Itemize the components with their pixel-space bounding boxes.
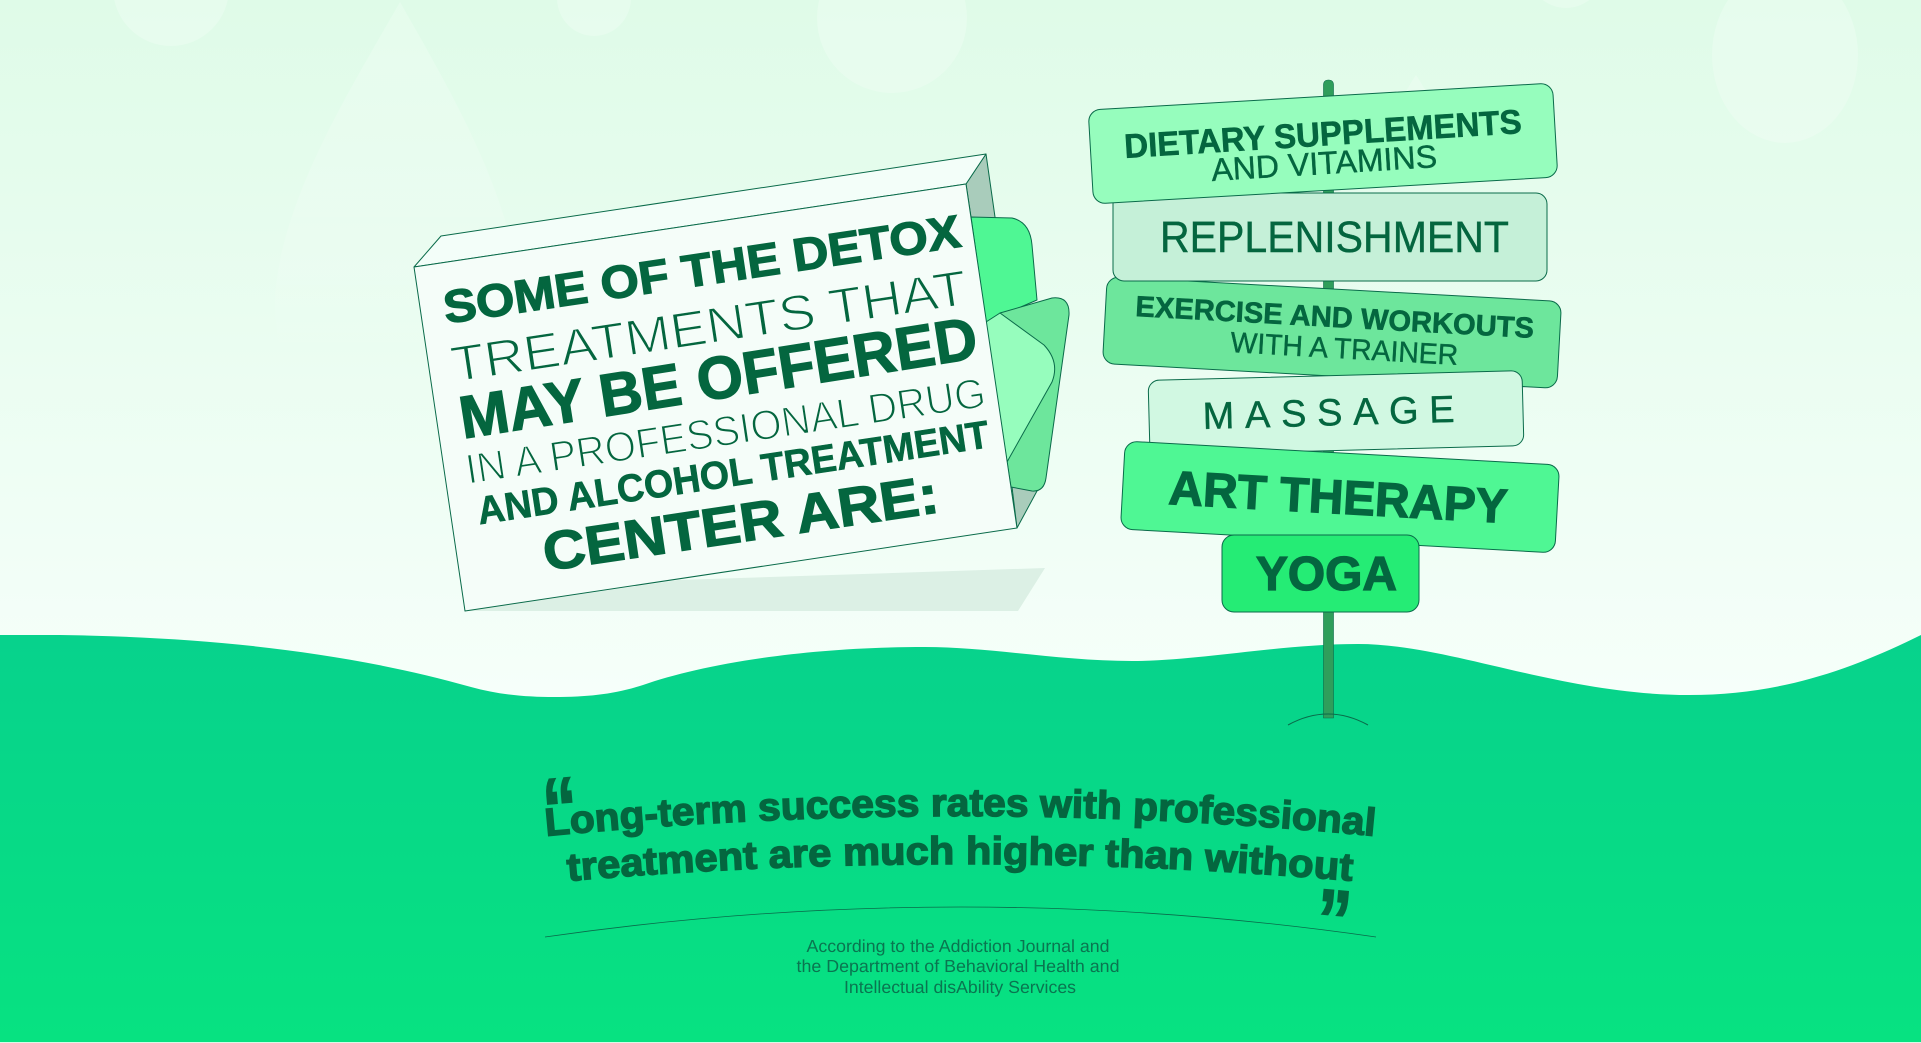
light card tab three	[986, 313, 1055, 462]
sign: massage	[1148, 371, 1524, 455]
sign: exercise: EXERCISE AND WORKOUTS	[1135, 291, 1535, 345]
sign: dietary supplements	[1088, 83, 1558, 204]
box headline text: SOME OF THE DETOX	[440, 205, 964, 333]
box headline text: IN A PROFESSIONAL DRUG	[462, 369, 989, 493]
source attribution: According to the Addiction Journal and	[806, 936, 1110, 956]
source attribution: the Department of Behavioral Health and	[796, 956, 1120, 976]
darker card tab two	[1000, 298, 1069, 491]
green card tab one	[971, 217, 1037, 322]
closing quote mark: ”	[1312, 870, 1355, 971]
box headline text: TREATMENTS THAT	[447, 260, 971, 393]
quotation text	[545, 788, 1376, 882]
box top flap	[414, 154, 986, 267]
quotation text: Long-term success rates with professional	[545, 788, 1376, 838]
opening quote mark: “	[539, 758, 582, 859]
sign: yoga: YOGA	[1256, 548, 1397, 601]
open box illustration	[414, 154, 1069, 611]
source attribution	[796, 936, 1120, 997]
sign: exercise: WITH A TRAINER	[1230, 327, 1459, 372]
sign: replenishment	[1113, 193, 1547, 281]
box shadow	[465, 568, 1045, 611]
box headline text	[440, 205, 992, 583]
sign: exercise	[1102, 277, 1562, 388]
sign: massage: MASSAGE	[1202, 389, 1455, 438]
box headline text: CENTER ARE:	[539, 465, 942, 583]
box headline text: MAY BE OFFERED	[455, 304, 982, 451]
sign: replenishment: REPLENISHMENT	[1160, 213, 1509, 262]
quotation text: treatment are much higher than without	[566, 835, 1354, 882]
pole base mound	[1288, 714, 1368, 725]
box front face	[414, 184, 1017, 611]
background sky	[0, 0, 1921, 700]
sign: yoga	[1222, 535, 1419, 612]
sign: art therapy	[1120, 441, 1560, 553]
curved divider	[545, 907, 1376, 937]
green wavy ground	[0, 635, 1921, 1042]
sign: dietary supplements: AND VITAMINS	[1210, 138, 1438, 188]
sign post pole	[1324, 80, 1334, 718]
box headline text: AND ALCOHOL TREATMENT	[474, 413, 992, 533]
sign: art therapy: ART THERAPY	[1167, 462, 1509, 534]
source attribution: Intellectual disAbility Services	[844, 977, 1076, 997]
box right side	[966, 154, 1037, 528]
ghost background shapes	[113, 0, 1858, 470]
sign: dietary supplements: DIETARY SUPPLEMENTS	[1123, 103, 1523, 166]
